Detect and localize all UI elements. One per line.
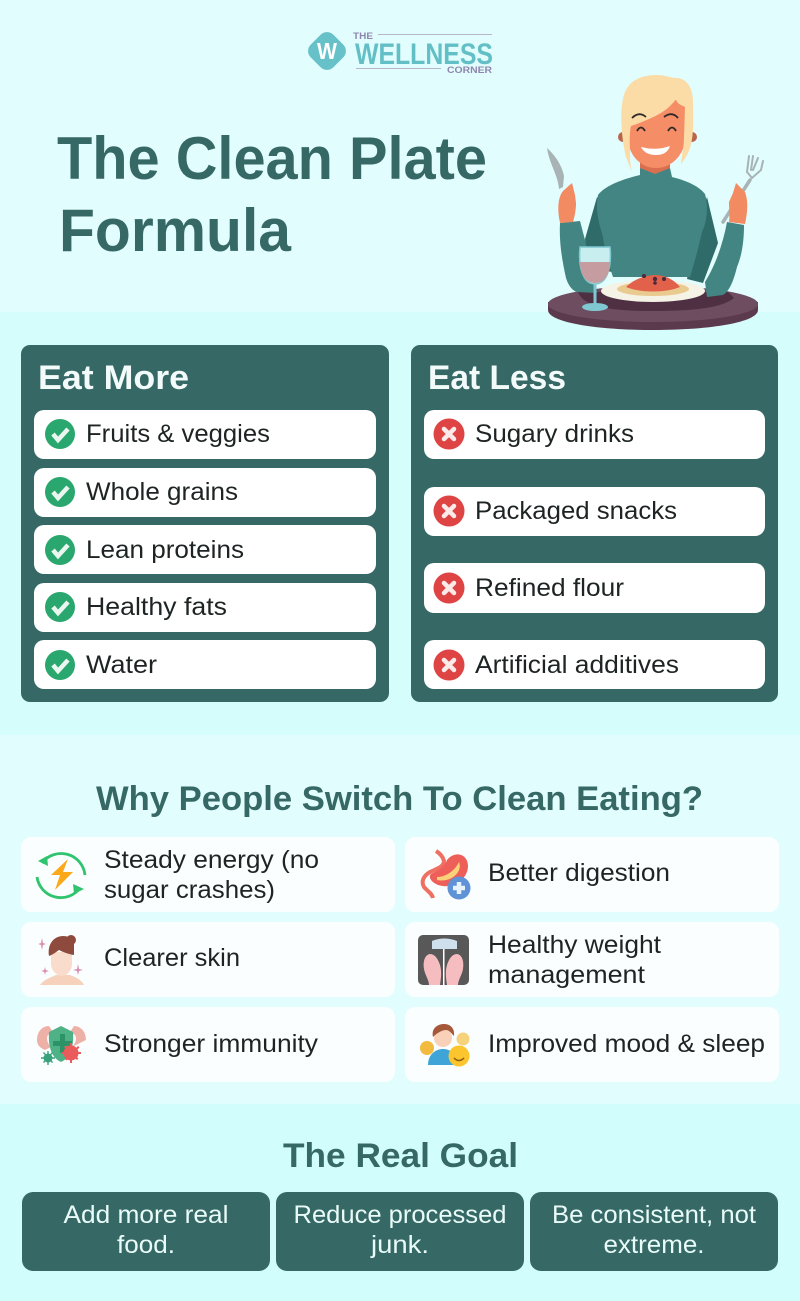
title: Formula (59, 197, 292, 264)
card: Healthy weight management: management (488, 961, 645, 989)
goal: Add more real food (22, 1192, 270, 1271)
item: Artificial additives (424, 640, 765, 689)
logo: The Wellness Corner (304, 28, 493, 76)
item: Whole grains (34, 468, 376, 517)
logo: The Wellness Corner: THE (353, 31, 373, 42)
torso (597, 168, 707, 277)
item: Lean proteins: Lean proteins (86, 536, 244, 564)
item: Healthy fats (34, 583, 376, 632)
item: Artificial additives: Artificial additives (475, 651, 679, 679)
goal: Add more real food: Add more real (64, 1201, 229, 1229)
item: Fruits & veggies (34, 410, 376, 459)
card: Better digestion (405, 837, 779, 912)
goal: Reduce processed junk (276, 1192, 524, 1271)
card: Clearer skin (21, 922, 395, 997)
icon: weighing scale (418, 935, 469, 985)
wine glass (580, 247, 610, 311)
item: Refined flour: Refined flour (475, 574, 624, 602)
logo: The Wellness Corner: CORNER (447, 65, 492, 76)
title: The Clean Plate (57, 125, 487, 192)
item: Whole grains: Whole grains (86, 478, 238, 506)
item: Water (34, 640, 376, 689)
icon: energy bolt (37, 853, 85, 898)
heading: Why People Switch To Clean Eating?: Why People Switch To Clean Eating? (96, 780, 703, 818)
goal: Reduce processed junk: junk. (370, 1231, 429, 1259)
title (57, 125, 487, 264)
head (618, 75, 697, 177)
table (548, 286, 758, 330)
goal: Reduce processed junk: Reduce processed (294, 1201, 506, 1229)
logo: The Wellness Corner: WELLNESS (355, 38, 493, 71)
card: Stronger immunity (21, 1007, 395, 1082)
logo: The Wellness Corner: W (317, 38, 337, 64)
heading: Eat More: Eat More (38, 359, 189, 397)
card: Improved mood & sleep (405, 1007, 779, 1082)
icon: happy person (420, 1024, 470, 1066)
sleeves (560, 221, 597, 293)
card: Better digestion: Better digestion (488, 859, 670, 887)
hands (558, 183, 576, 223)
card: Steady energy: sugar crashes) (104, 876, 275, 904)
card: Healthy weight management: Healthy weight (488, 931, 661, 959)
panel: Eat Less (411, 345, 778, 702)
goal: Be consistent, not extreme: extreme. (604, 1231, 704, 1259)
heading: Eat Less: Eat Less (428, 359, 566, 397)
pasta plate (601, 274, 705, 302)
fork (723, 156, 763, 222)
item: Water: Water (86, 651, 157, 679)
item: Lean proteins (34, 525, 376, 574)
item: Packaged snacks: Packaged snacks (475, 497, 677, 525)
panel: Eat More (21, 345, 389, 702)
goal: Be consistent, not extreme (530, 1192, 778, 1271)
item: Packaged snacks (424, 487, 765, 536)
knife (547, 148, 564, 189)
icon: stomach (423, 851, 470, 900)
back shading (585, 197, 718, 283)
item: Sugary drinks (424, 410, 765, 459)
heading: The Real Goal: The Real Goal (283, 1137, 518, 1175)
illustration: woman eating at table (547, 75, 763, 330)
item: Sugary drinks: Sugary drinks (475, 420, 634, 448)
item: Fruits & veggies: Fruits & veggies (86, 420, 270, 448)
goal: Be consistent, not extreme: Be consistent, not (552, 1201, 756, 1229)
goal: Add more real food: food. (117, 1231, 175, 1259)
card: Steady energy: Steady energy (no (104, 846, 319, 874)
icon: face (38, 935, 84, 985)
item: Healthy fats: Healthy fats (86, 593, 227, 621)
card: Improved mood & sleep: Improved mood & sleep (488, 1030, 765, 1058)
card: Steady energy (21, 837, 395, 912)
item: Refined flour (424, 563, 765, 613)
card: Clearer skin: Clearer skin (104, 944, 240, 972)
card: Healthy weight management (405, 922, 779, 997)
card: Stronger immunity: Stronger immunity (104, 1030, 319, 1058)
icon: shield (37, 1026, 86, 1065)
